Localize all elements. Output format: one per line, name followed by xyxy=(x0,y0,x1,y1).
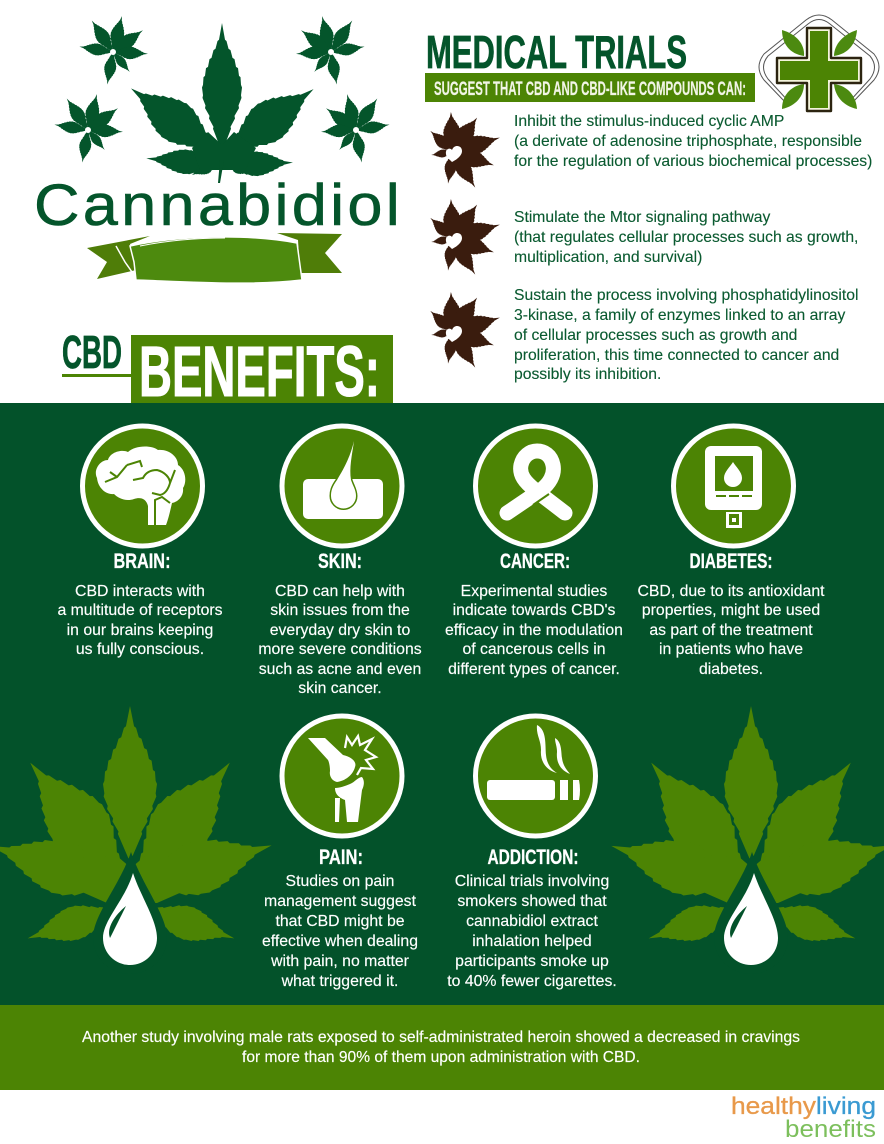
heading: Cancer: CANCER: xyxy=(500,550,570,573)
text block: Skin: everyday dry skin to xyxy=(270,622,410,639)
heading: Pain: PAIN: xyxy=(319,846,363,869)
icon: brain xyxy=(82,426,202,546)
text block: Skin: CBD can help with xyxy=(275,583,405,600)
text block: Cancer: indicate towards CBD's xyxy=(453,602,616,619)
heading: Skin: SKIN: xyxy=(318,550,362,573)
text block: Brain: us fully conscious. xyxy=(76,641,204,658)
panel: study callout band: Another study involving male rats exposed to self-administrated heroin showed a decreased in cravings xyxy=(82,1029,800,1046)
text block: trial 2: (that regulates cellular processes such as growth, xyxy=(514,229,858,246)
title: Cannabidiol: Cannabidiol xyxy=(34,173,403,238)
heading: Brain: BRAIN: xyxy=(114,550,170,573)
text block: trial 2: Stimulate the Mtor signaling pathway xyxy=(514,209,771,226)
text block: Addiction: to 40% fewer cigarettes. xyxy=(447,973,617,990)
text block: Cancer: of cancerous cells in xyxy=(462,641,606,658)
text block: trial 2: multiplication, and survival) xyxy=(514,249,702,266)
text block: trial 3: possibly its inhibition. xyxy=(514,366,661,383)
heading: CBD: CBD xyxy=(62,326,122,378)
text block: Diabetes: properties, might be used xyxy=(642,602,820,619)
logo: healthy living benefits: benefits xyxy=(785,1116,876,1143)
text block: Addiction: smokers showed that xyxy=(457,893,607,910)
icon: skin xyxy=(282,426,402,546)
text block: Addiction: participants smoke up xyxy=(455,953,609,970)
icon: cancer ribbon xyxy=(476,426,596,546)
text block: Pain: what triggered it. xyxy=(281,973,398,990)
panel: study callout band xyxy=(0,1005,884,1090)
heading: BENEFITS xyxy=(131,333,393,412)
text block: Pain: management suggest xyxy=(264,893,417,910)
text block: Skin: such as acne and even xyxy=(259,661,421,678)
text block: Skin: more severe conditions xyxy=(258,641,422,658)
heading: Diabetes: DIABETES: xyxy=(690,550,772,573)
panel: benefits background xyxy=(0,403,884,1005)
small leaf: top left xyxy=(78,14,148,86)
icon: brown leaf 3 xyxy=(426,292,503,372)
heading: Medical Trials: MEDICAL TRIALS xyxy=(426,26,687,78)
logo: healthy living benefits xyxy=(731,1093,876,1143)
heading: BENEFITS: BENEFITS: xyxy=(139,333,380,412)
panel: study callout band: for more than 90% of them upon administration with CBD. xyxy=(242,1049,640,1066)
text block: Diabetes: CBD, due to its antioxidant xyxy=(637,583,825,600)
text block: trial 1: for the regulation of various biochemical processes) xyxy=(514,153,872,170)
icon: brown leaf 1 xyxy=(426,112,503,192)
heading: Addiction: ADDICTION: xyxy=(488,846,578,869)
icon: brown leaf 2 xyxy=(426,199,503,279)
small leaf: lower right xyxy=(321,92,391,164)
text block: Cancer: Experimental studies xyxy=(461,583,607,600)
icon: leaf with drop, left xyxy=(0,706,280,974)
text block: Addiction: Clinical trials involving xyxy=(455,873,609,890)
CBD underline xyxy=(62,374,131,377)
text block: trial 3: Sustain the process involving phosphatidylinositol xyxy=(514,287,858,304)
icon: leaf with drop, right xyxy=(603,706,884,974)
text block: Brain: in our brains keeping xyxy=(67,622,213,639)
icon: glucose meter xyxy=(674,426,794,546)
icon: cigarette xyxy=(476,716,596,836)
small leaf: lower left xyxy=(53,92,123,164)
text block: Diabetes: diabetes. xyxy=(699,661,763,678)
text block: Pain: with pain, no matter xyxy=(270,953,409,970)
text block: trial 1: Inhibit the stimulus-induced cyclic AMP xyxy=(514,113,784,130)
text block: trial 3: proliferation, this time connected to cancer and xyxy=(514,347,839,364)
subheading bar xyxy=(425,73,755,102)
text block: Diabetes: in patients who have xyxy=(659,641,803,658)
text block: Addiction: cannabidiol extract xyxy=(466,913,598,930)
text block: Pain: Studies on pain xyxy=(286,873,394,890)
text block: Pain: that CBD might be xyxy=(275,913,405,930)
icon: knee joint pain xyxy=(282,716,402,836)
icon: medical cross xyxy=(759,15,879,111)
text block: Cancer: different types of cancer. xyxy=(448,661,620,678)
ribbon banner xyxy=(87,233,342,283)
text block: trial 3: 3-kinase, a family of enzymes linked to an array xyxy=(514,307,845,324)
text block: Addiction: inhalation helped xyxy=(472,933,592,950)
text block: Pain: effective when dealing xyxy=(262,933,418,950)
logo: main cannabis leaf xyxy=(118,23,326,183)
text block: Skin: skin issues from the xyxy=(270,602,410,619)
text block: trial 3: of cellular processes such as growth and xyxy=(514,327,797,344)
text block: Skin: skin cancer. xyxy=(298,680,382,697)
text block: trial 1: (a derivate of adenosine triphosphate, responsible xyxy=(514,133,862,150)
text block: Cancer: efficacy in the modulation xyxy=(445,622,623,639)
small leaf: top right xyxy=(296,14,366,86)
text block: Brain: a multitude of receptors xyxy=(57,602,223,619)
text block: Brain: CBD interacts with xyxy=(75,583,205,600)
text block: Diabetes: as part of the treatment xyxy=(649,622,813,639)
logo: healthy living benefits: healthy living xyxy=(731,1093,876,1120)
